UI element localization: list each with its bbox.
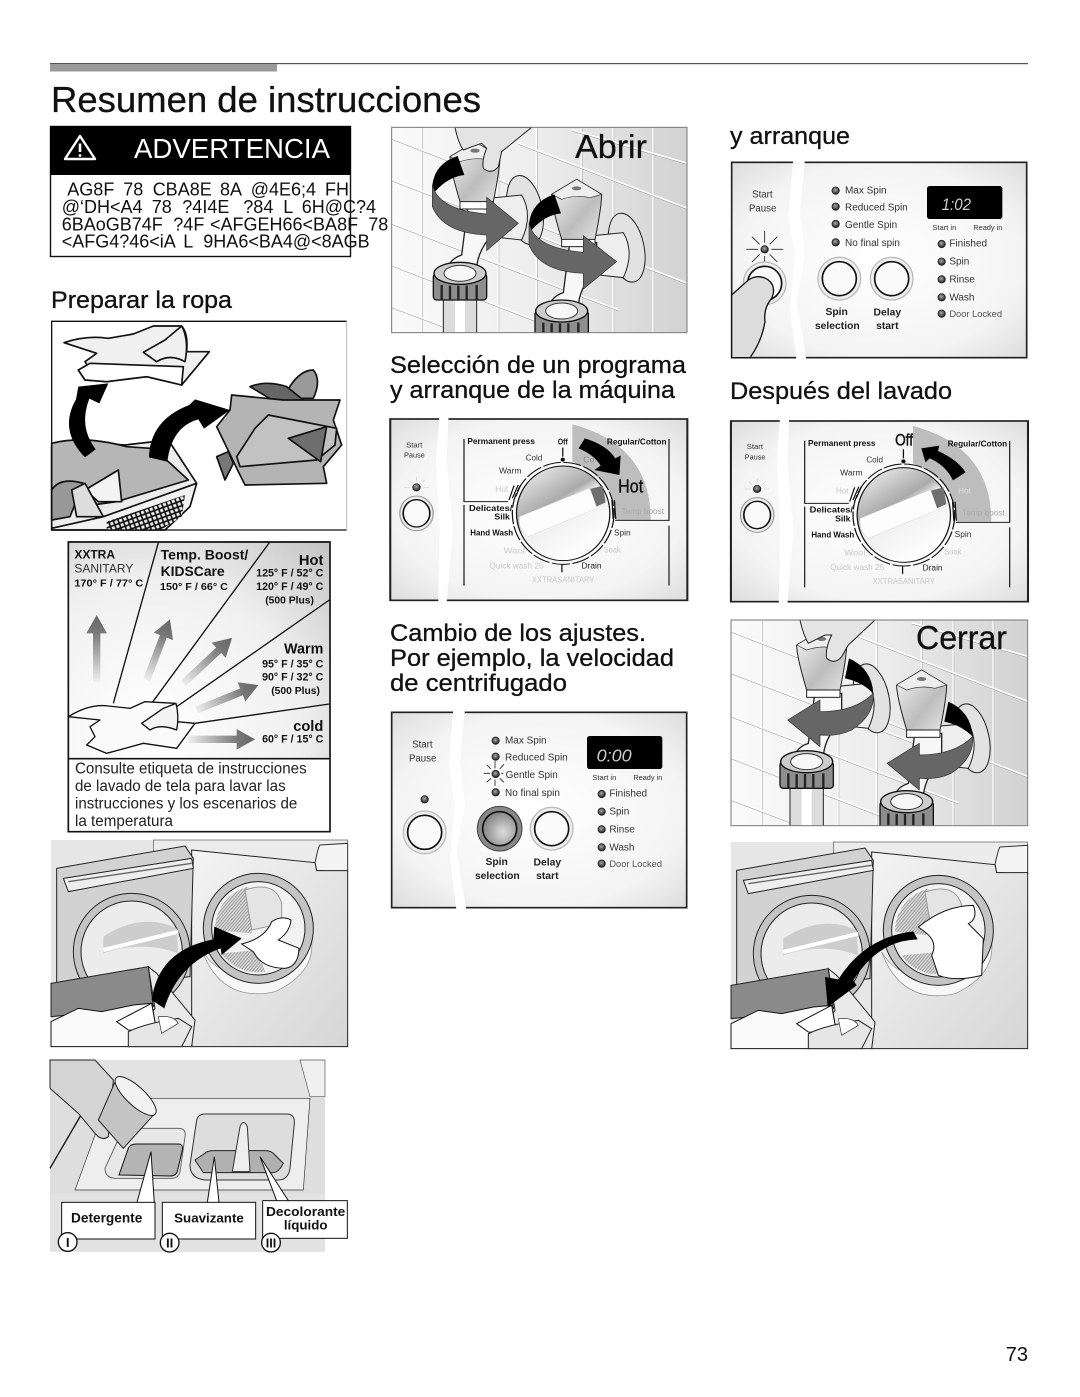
warning text: 6BAoGB74F (62, 214, 163, 234)
dial labels: Hot (836, 487, 849, 496)
temperature note: instrucciones y los escenarios de (75, 796, 297, 813)
dial labels: Warm (499, 467, 522, 476)
temperature labels: 60° F / 15° C (262, 734, 324, 746)
warning text: <AFGEH66<BA8F (210, 214, 358, 234)
panel: programme dial to hot (390, 415, 687, 605)
grey selection sector (572, 424, 651, 520)
warning header bar (50, 126, 351, 175)
spin option labels: No final spin (505, 788, 560, 799)
display captions: Ready in (633, 773, 662, 782)
dial labels (745, 431, 1007, 586)
dial labels: Spin (614, 528, 631, 538)
temperature labels: 170° F / 77° C (74, 579, 144, 590)
warning text: 78 (152, 197, 172, 217)
dial labels: Regular/Cotton (948, 439, 1007, 448)
dial labels: Start (747, 442, 764, 451)
panel: temperature guide (68, 542, 330, 832)
heading: after washing: Después del lavado (730, 378, 952, 405)
pressed spin button (477, 806, 522, 851)
dial labels: XXTRASANITARY (873, 577, 935, 586)
hand (800, 620, 875, 661)
label: Detergente (58, 1152, 155, 1251)
panel: close taps (730, 620, 1028, 826)
label: Suavizante: Suavizante (174, 1211, 244, 1226)
spin option LEDs (484, 737, 504, 796)
spin option labels: Max Spin (505, 735, 547, 746)
heading: change settings: de centrifugado (390, 670, 567, 697)
temperature labels: 95° F / 35° C (262, 658, 324, 670)
arrow: to white pile (69, 383, 108, 457)
warning text: CBA8E (153, 180, 212, 200)
clothes: white pile (64, 326, 209, 385)
panel: programme dial to off (731, 417, 1028, 607)
dial labels: Hot (618, 476, 643, 497)
arrow: close tap 2 (887, 702, 973, 790)
button labels (815, 307, 901, 332)
temperature labels: KIDSCare (161, 563, 225, 579)
arrow: to dark pile (149, 399, 230, 462)
label: Detergente: I (66, 1235, 70, 1250)
status labels: Spin (949, 256, 969, 267)
button labels: selection (475, 871, 520, 882)
panel: spin selection controls (392, 708, 687, 912)
dial labels: Delicates/ (810, 505, 853, 514)
start and pause labels (409, 740, 436, 765)
dial labels: Soak (604, 545, 621, 554)
display: 1:02 (942, 195, 972, 214)
status labels: Door Locked (949, 309, 1002, 319)
temperature labels: Temp. Boost/ (161, 546, 248, 562)
start and pause labels: Pause (409, 754, 436, 765)
dial labels: Hand Wash (811, 529, 854, 539)
grey selection sector (913, 426, 991, 522)
page number: 73 (1006, 1344, 1028, 1366)
start button pressed by finger (743, 262, 786, 305)
spin option labels (505, 735, 568, 799)
dial labels: Off (895, 431, 914, 449)
heading: start: y arranque (730, 123, 850, 150)
temperature labels: 120° F / 49° C (256, 581, 324, 593)
heading: change settings: Cambio de los ajustes. (390, 620, 646, 647)
temperature note (75, 761, 307, 830)
icon: warning triangle (65, 136, 95, 159)
panel: unloading the washer (731, 842, 1028, 1049)
temperature labels: Hot (299, 553, 323, 569)
heading: select programme: y arranque de la máquina (390, 377, 676, 404)
label: Cerrar: Cerrar (916, 619, 1007, 656)
basket (52, 440, 197, 530)
dial labels: Permanent press (467, 437, 535, 446)
dial labels: Spin (955, 530, 971, 540)
label: Detergente: Detergente (71, 1211, 143, 1226)
start and pause labels (749, 190, 776, 215)
temperature labels: 150° F / 66° C (160, 582, 229, 593)
panel: warning box (50, 126, 388, 256)
warning text: ?4F (173, 214, 204, 234)
temperature labels: SANITARY (74, 562, 134, 575)
spin option labels (845, 185, 908, 249)
temperature labels (74, 546, 324, 746)
button labels: Delay (534, 858, 561, 869)
arrow: turn tap 2 (529, 194, 617, 289)
dial labels: Quick wash 25 (489, 561, 544, 570)
heading: change settings (390, 620, 674, 697)
warning text: AG8F (67, 180, 114, 200)
compartment II and III (190, 1114, 294, 1180)
gradient arrows (86, 615, 262, 750)
icon: flashing LED (746, 231, 783, 264)
warning text: L (283, 197, 293, 217)
dial labels: Cold (526, 454, 542, 463)
dial (400, 439, 669, 586)
display captions (932, 223, 1002, 232)
dial labels: Drain (923, 563, 943, 573)
temperature labels: Warm (284, 641, 323, 657)
clothes icon (68, 702, 195, 753)
button labels (475, 857, 561, 882)
arrow: out of washer (825, 931, 918, 1007)
hand (455, 127, 532, 171)
temperature labels: XXTRA (74, 547, 115, 561)
temperature frame (68, 542, 330, 832)
label: Decolorante liquido (260, 1157, 347, 1252)
temperature note: la temperatura (75, 813, 173, 830)
warning text: ?4I4E (182, 197, 229, 217)
warning text: 9HA6<BA4@<8AGB (203, 232, 370, 252)
display captions (592, 773, 662, 782)
temperature labels: 125° F / 52° C (256, 568, 324, 580)
start button (403, 811, 446, 854)
warning text: L (183, 232, 193, 252)
status labels: Finished (609, 789, 647, 800)
label: Decolorante liquido: líquido (284, 1217, 328, 1232)
warning text: <AFG4?46<iA (62, 232, 176, 252)
warning text: 8A (220, 180, 242, 200)
warning text: 78 (368, 214, 388, 234)
compartment I (105, 1128, 185, 1178)
clothes inside drum (242, 918, 299, 968)
start and pause labels: Start (752, 190, 773, 201)
arrow: into washer (152, 927, 242, 1008)
status labels: Wash (949, 292, 974, 303)
spin option labels: Reduced Spin (845, 203, 908, 214)
label: Suavizante (160, 1157, 256, 1252)
start and pause labels: Pause (749, 204, 776, 215)
button labels: Delay (874, 308, 901, 319)
button labels: start (876, 321, 899, 332)
warning text: FH (325, 180, 349, 200)
label: Decolorante liquido: III (266, 1237, 276, 1251)
arrow: clockwise to hot (579, 438, 621, 475)
icon: finger (732, 277, 774, 358)
spin option labels: Reduced Spin (505, 753, 568, 764)
arrow: close tap 1 (788, 658, 873, 747)
button labels: Spin (485, 857, 508, 868)
arrow: turn tap 1 (432, 156, 518, 251)
clothes in drum (918, 905, 983, 979)
panel: loading the washer (51, 840, 348, 1047)
tap 2 (534, 178, 646, 332)
display (927, 186, 1002, 219)
top rule (50, 63, 1028, 72)
status labels (949, 239, 1002, 319)
status labels: Door Locked (609, 859, 662, 869)
dial labels: Warm (840, 468, 863, 478)
panel: open taps (391, 126, 688, 334)
temperature labels: (500 Plus) (271, 686, 320, 697)
tap 1 (779, 636, 891, 826)
image frame (52, 321, 347, 530)
heading: select programme: Selección de un programa (390, 352, 687, 379)
dial labels: Cold (866, 455, 883, 465)
status LEDs (598, 790, 605, 867)
warning text: @4E6;4 (251, 180, 316, 200)
dial labels: Hot (958, 487, 971, 496)
status labels: Finished (949, 239, 987, 250)
heading: select programme (390, 352, 687, 404)
status labels: Rinse (949, 274, 975, 285)
label: Decolorante liquido: Decolorante (266, 1204, 345, 1219)
spin option labels: Gentle Spin (845, 220, 897, 231)
panel: detergent dispenser (50, 1060, 347, 1252)
arrow: back to off (921, 446, 966, 480)
dial labels: Soak (944, 546, 962, 556)
button labels: start (536, 871, 559, 882)
dial labels: Wool (504, 547, 525, 556)
dial labels: Pause (404, 451, 425, 459)
label: Abrir: Abrir (575, 128, 647, 165)
display captions: Start in (932, 223, 956, 232)
dial labels: Permanent press (808, 439, 876, 448)
status LEDs (938, 240, 945, 317)
dial labels: Temp boost (962, 509, 1005, 518)
buttons (818, 257, 913, 300)
tap 2 (879, 669, 991, 826)
dial labels: Drain (582, 562, 602, 571)
spin option labels: Gentle Spin (506, 770, 558, 781)
heading: prepare laundry: Preparar la ropa (51, 287, 233, 314)
button labels: selection (815, 321, 860, 332)
dial labels: Pause (745, 452, 766, 461)
warning heading: ADVERTENCIA (134, 133, 330, 164)
clothes: dark pile (217, 370, 342, 485)
dial labels: Temp boost (622, 507, 664, 517)
heading: change settings: Por ejemplo, la velocidad (390, 645, 674, 672)
temperature labels: 90° F / 32° C (262, 672, 324, 684)
warning text (62, 180, 388, 252)
dial labels: Wool (844, 548, 866, 558)
display captions: Start in (592, 773, 616, 782)
spin option labels: No final spin (845, 238, 900, 249)
dial labels: Silk (494, 512, 511, 521)
start and pause labels: Start (412, 740, 433, 751)
display captions: Ready in (973, 223, 1002, 232)
button labels: Spin (825, 307, 848, 318)
dial labels: Start (406, 440, 423, 449)
panel: start pause controls (732, 158, 1027, 362)
dial labels: Regular/Cotton (607, 437, 667, 446)
dial labels: Hand Wash (470, 528, 513, 537)
dial labels: Silk (835, 513, 851, 523)
hand with cup (50, 1060, 162, 1148)
dial labels: Quick wash 25 (830, 563, 884, 572)
dial labels: Delicates/ (469, 503, 513, 513)
spin option LEDs (832, 187, 839, 246)
display (587, 736, 662, 769)
tap 1 (432, 144, 544, 332)
dial labels: Co (583, 455, 595, 465)
status labels: Wash (609, 842, 634, 853)
temperature labels: cold (293, 719, 323, 735)
title: Resumen de instrucciones (51, 79, 481, 120)
dial labels: Off (558, 437, 569, 446)
status labels: Rinse (609, 824, 635, 835)
icon: LED (421, 796, 428, 803)
dial labels: XXTRASANITARY (532, 575, 594, 584)
status labels (609, 789, 662, 869)
warning text: ?84 (243, 197, 273, 217)
warning text: 78 (123, 180, 143, 200)
dial (741, 441, 1010, 587)
panel: sorting laundry illustration (52, 321, 347, 530)
dial labels (404, 437, 667, 584)
warning text: @‘DH<A4 (62, 197, 143, 217)
spin option labels: Max Spin (845, 185, 887, 196)
label: Suavizante: II (166, 1236, 173, 1251)
delay button (530, 807, 573, 850)
dial labels: Hot (495, 485, 508, 495)
temperature labels: (500 Plus) (265, 595, 314, 606)
display: 0:00 (597, 746, 632, 766)
temperature note: Consulte etiqueta de instrucciones (75, 761, 307, 778)
warning text: 6H@C?4 (302, 197, 376, 217)
status labels: Spin (609, 806, 629, 817)
temperature note: de lavado de tela para lavar las (75, 778, 286, 795)
